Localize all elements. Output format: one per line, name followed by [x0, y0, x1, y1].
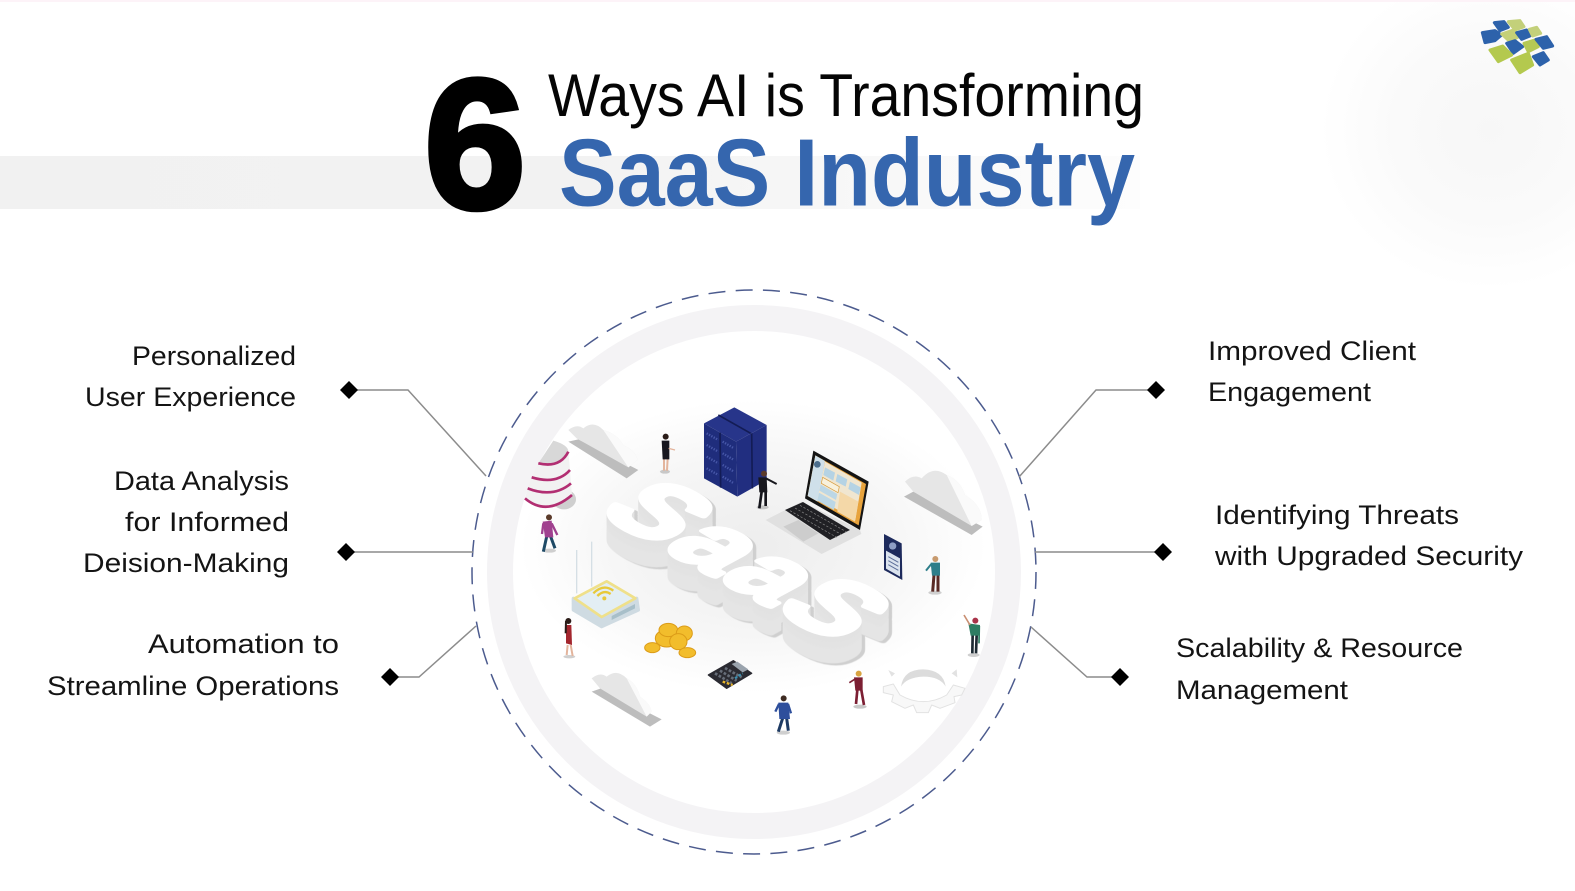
icon: cloud lower left	[592, 673, 662, 727]
icon: server rack	[704, 407, 767, 497]
right item: scalability: Management	[1176, 675, 1349, 705]
icon: database cylinder	[525, 441, 576, 509]
isometric SaaS illustration	[520, 400, 987, 735]
icon: gold coins	[645, 623, 696, 658]
right item: identifying threats: with Upgraded Security	[1214, 541, 1524, 571]
person: man in suit	[757, 471, 777, 509]
icon: gear	[883, 669, 965, 713]
left item: data analysis: Deision-Making	[83, 548, 289, 578]
title line 1: Ways AI is Transforming	[548, 62, 1144, 129]
icon: cloud right	[904, 471, 983, 535]
central circle	[472, 290, 1036, 854]
right item: client engagement	[1019, 336, 1417, 477]
person: man in teal	[926, 556, 942, 595]
right item: client engagement: Improved Client	[1208, 336, 1417, 366]
left item: automation: Streamline Operations	[47, 671, 339, 701]
right item: identifying threats	[1035, 500, 1524, 571]
left item: data analysis: for Informed	[125, 507, 289, 537]
title	[424, 42, 1144, 248]
right item: client engagement: Engagement	[1208, 377, 1372, 407]
title line 2: SaaS Industry	[559, 120, 1135, 226]
icon: cloud top left	[568, 425, 638, 478]
logo	[1482, 21, 1553, 73]
person: woman in black	[660, 434, 675, 474]
left item: personalized user experience: User Experience	[85, 382, 296, 412]
left item: data analysis	[83, 466, 473, 578]
left item: personalized user experience: Personalized	[132, 341, 296, 371]
person: man in blue	[775, 695, 791, 735]
person: woman in green waving	[964, 615, 980, 657]
right item: identifying threats: Identifying Threats	[1215, 500, 1459, 530]
icon: security checklist tablet	[884, 534, 902, 580]
right item: scalability: Scalability & Resource	[1176, 633, 1463, 663]
right item: scalability	[1031, 627, 1463, 705]
left item: personalized user experience	[85, 341, 486, 476]
title numeral 6: 6	[424, 42, 526, 248]
icon: wifi router	[573, 542, 638, 627]
icon: calculator	[708, 661, 752, 688]
icon: laptop	[766, 451, 869, 554]
person: woman in red	[563, 618, 575, 658]
person: man in purple	[542, 514, 557, 553]
left item: data analysis: Data Analysis	[114, 466, 289, 496]
3D SaaS lettering: SaaS	[575, 465, 924, 655]
left item: automation: Automation to	[148, 629, 339, 659]
person: woman in maroon	[849, 671, 867, 709]
left item: automation	[47, 626, 476, 701]
